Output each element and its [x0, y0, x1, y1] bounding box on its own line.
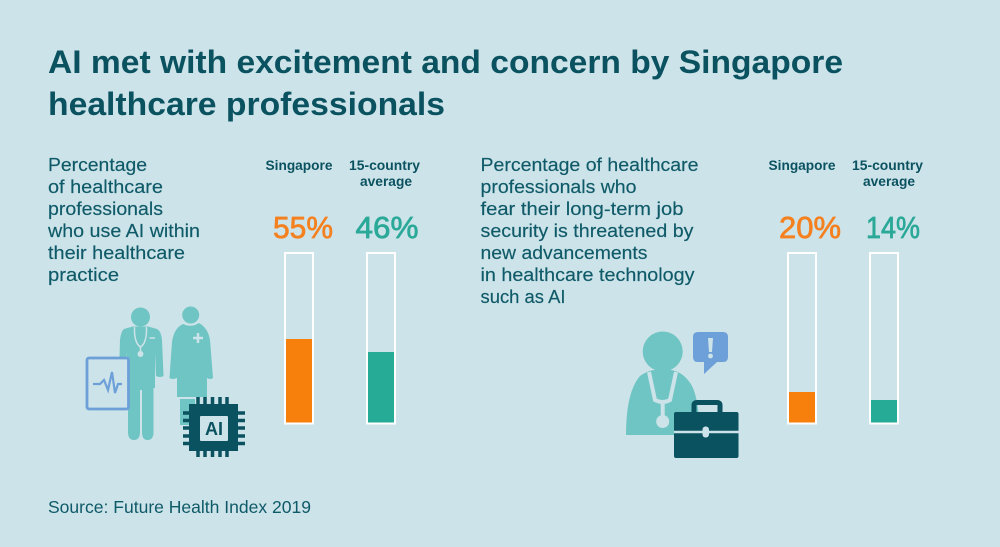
column label: Singapore: Singapore	[266, 158, 333, 173]
column label: 15-country average: average	[360, 174, 412, 189]
text block: job security description: professionals who	[480, 176, 636, 197]
text block: AI use description: practice	[48, 264, 119, 285]
text block: AI use description	[47, 154, 200, 285]
text block: job security description: such as AI	[480, 286, 566, 307]
column label: 15-country average: 15-country	[349, 158, 420, 173]
title: healthcare professionals	[48, 86, 445, 122]
text block: AI use description: Percentage	[48, 154, 147, 175]
icon: alert speech bubble	[693, 332, 728, 374]
value: 55%: 55%	[273, 210, 333, 245]
text block: job security description: Percentage of healthcare	[480, 154, 698, 175]
bar: average 46%	[367, 253, 395, 424]
text block: job security description: in healthcare technology	[480, 264, 695, 285]
value: 46%: 46%	[356, 210, 418, 245]
icon: male doctor	[119, 308, 164, 440]
chart: AI use bars	[266, 158, 420, 424]
bar: average 14%	[870, 253, 898, 424]
column label: 15-country average: average	[863, 174, 915, 189]
stethoscope	[134, 327, 155, 356]
icon: doctors with tablet and AI chip	[87, 306, 245, 457]
text block: AI use description: professionals	[48, 198, 163, 219]
text block: job security description	[480, 154, 698, 307]
text block: job security description: fear their long-term job	[480, 198, 684, 219]
title: AI met with excitement and concern by Singapore	[48, 44, 843, 80]
source note: Source: Future Health Index 2019	[48, 497, 311, 517]
text block: AI use description: of healthcare	[48, 176, 163, 197]
icon: AI chip	[183, 397, 245, 457]
chart: job security bars	[768, 158, 923, 424]
icon: AI chip: AI	[205, 419, 223, 439]
column label: 15-country average	[852, 158, 923, 189]
icon: doctor bust	[626, 332, 700, 435]
column label: Singapore: Singapore	[768, 158, 836, 173]
icon: worried doctor with briefcase	[626, 332, 738, 458]
bar: Singapore 55%	[285, 253, 313, 424]
icon: briefcase	[674, 402, 738, 458]
column label: 15-country average	[349, 158, 420, 189]
title	[48, 44, 843, 122]
text block: job security description: security is threatened by	[480, 220, 694, 241]
column label: 15-country average: 15-country	[852, 158, 923, 173]
value: 20%: 20%	[779, 210, 841, 245]
icon: tablet with heartbeat	[87, 358, 128, 409]
text block: job security description: new advancements	[480, 242, 648, 263]
text block: AI use description: who use AI within	[47, 220, 200, 241]
icon: female nurse	[170, 306, 213, 425]
value: 14%: 14%	[866, 210, 920, 245]
text block: AI use description: their healthcare	[48, 242, 185, 263]
bar: Singapore 20%	[788, 253, 816, 424]
